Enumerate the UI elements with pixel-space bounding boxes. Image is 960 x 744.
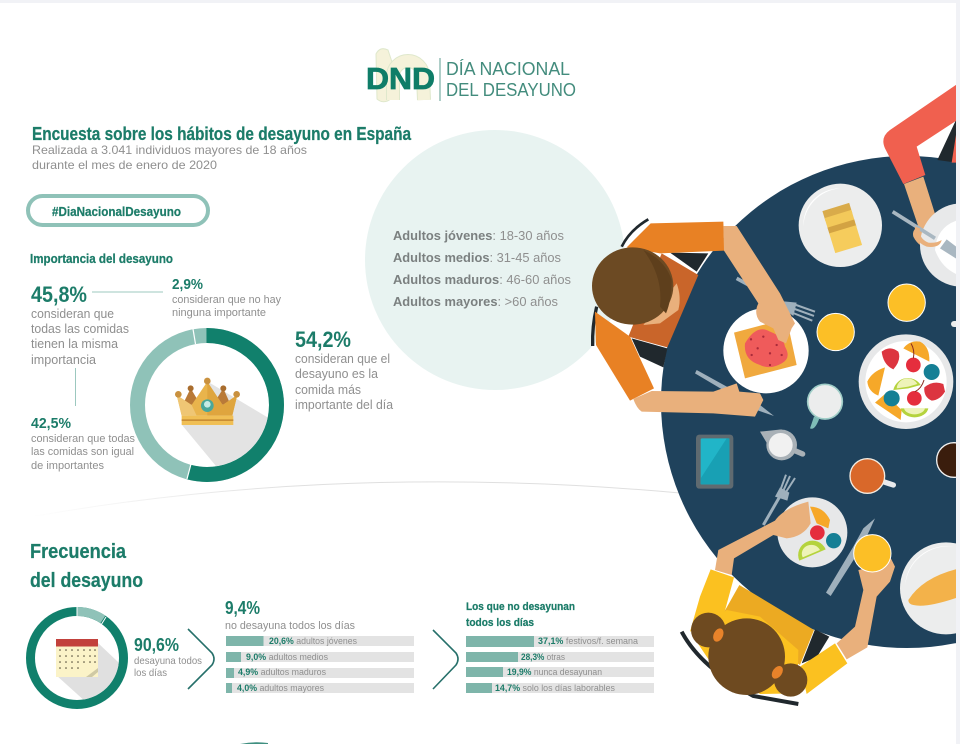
- icon: calendar: [56, 639, 119, 700]
- stat 54,2%: consideran que el: [295, 352, 390, 366]
- bar chart: adult groups: 4,0% adultos mayores: [237, 683, 324, 693]
- cup: [808, 384, 842, 419]
- section divider curve: [30, 482, 680, 517]
- icon: crown: [175, 378, 268, 466]
- logo: Día Nacional del Desayuno: DEL DESAYUNO: [446, 80, 576, 100]
- survey description: Realizada a 3.041 individuos mayores de 18 años: [32, 143, 307, 157]
- stat 2,9%: consideran que no hay: [172, 294, 281, 306]
- table: [661, 156, 960, 648]
- stat 54,2%: 54,2%: [295, 327, 351, 352]
- stat 45,8%: todas las comidas: [31, 322, 129, 336]
- orange slices: [867, 341, 929, 420]
- milk cup handle: [810, 417, 819, 429]
- bar chart: adult groups: 9,0% adultos medios: [246, 652, 328, 662]
- knife: [695, 370, 774, 416]
- bar chart: adult groups: 4,9% adultos maduros: [238, 667, 326, 677]
- stat 45,8%: [31, 282, 129, 367]
- stat 90,6%: [134, 635, 202, 679]
- stat 45,8%: 45,8%: [31, 282, 87, 307]
- juice glasses: [817, 284, 925, 351]
- tea cup: [850, 459, 893, 493]
- next section icon cut off: [240, 742, 268, 744]
- heading: del desayuno: [30, 569, 143, 592]
- bar chart: reasons: [466, 636, 654, 693]
- stat 54,2%: desayuno es la: [295, 367, 378, 381]
- survey description: [32, 143, 307, 172]
- arrow: chevron 1: [188, 629, 214, 689]
- stat 54,2%: comida más: [295, 383, 361, 397]
- illustration: breakfast table: [592, 83, 960, 704]
- heading: Importancia del desayuno: [30, 252, 173, 266]
- stat 45,8%: tienen la misma: [31, 337, 118, 351]
- plate right with knife: [893, 203, 960, 287]
- stat 90,6%: 90,6%: [134, 635, 179, 655]
- stat 42,5%: de importantes: [31, 460, 104, 472]
- survey description: durante el mes de enero de 2020: [32, 158, 217, 172]
- stat 42,5%: [31, 415, 135, 472]
- plate with crackers: [799, 184, 882, 267]
- bar chart: reasons: 14,7% solo los días laborables: [495, 683, 615, 693]
- heading: los que no desayunan: todos los días: [466, 617, 534, 629]
- heading: los que no desayunan: [466, 601, 575, 629]
- bar chart: adult groups: [226, 636, 414, 693]
- stat 45,8%: importancia: [31, 353, 96, 367]
- person in orange: [592, 219, 795, 417]
- upper illustration items: [592, 83, 960, 429]
- stat 42,5%: 42,5%: [31, 415, 71, 432]
- strawberries: [882, 348, 945, 401]
- fruit plate: [859, 334, 953, 429]
- knife lower: [826, 518, 875, 596]
- stat 9,4%: no desayuna todos los días: [225, 620, 355, 632]
- logo: Día Nacional del Desayuno: DND: [366, 61, 435, 96]
- plate with toast: [723, 308, 809, 393]
- stat 45,8%: consideran que: [31, 307, 114, 321]
- stat 9,4%: [225, 598, 355, 632]
- small white item at table edge: [951, 321, 956, 327]
- age groups circle: Adultos medios: 31-45 años: [393, 250, 561, 265]
- age groups circle: Adultos maduros: 46-60 años: [393, 272, 571, 287]
- logo: Día Nacional del Desayuno: DÍA NACIONAL: [446, 59, 570, 79]
- bar chart: adult groups: 20,6% adultos jóvenes: [269, 636, 357, 646]
- donut chart with calendar: [30, 607, 135, 712]
- plate lower: [777, 497, 847, 567]
- stat 54,2%: [295, 327, 393, 412]
- heading: los que no desayunan: Los que no desayunan: [466, 601, 575, 613]
- bar chart: reasons: 37,1% festivos/f. semana: [538, 636, 638, 646]
- logo: Día Nacional del Desayuno: [366, 49, 576, 102]
- age groups circle: Adultos jóvenes: 18-30 años: [393, 228, 564, 243]
- person in coral: [883, 83, 958, 249]
- stat 42,5%: consideran que todas: [31, 433, 135, 445]
- lime slices: [893, 378, 928, 417]
- stat 42,5%: las comidas son igual: [31, 446, 134, 458]
- person in yellow: [682, 502, 895, 704]
- hashtag pill: #DiaNacionalDesayuno: [52, 204, 181, 219]
- heading: [30, 540, 143, 592]
- title: Encuesta sobre los hábitos de desayuno en España: [32, 124, 412, 144]
- bread plate: [900, 542, 960, 634]
- panel: importancia del desayuno: [30, 252, 393, 495]
- juice glass lower: [854, 535, 891, 572]
- arrow: chevron 2: [433, 630, 458, 689]
- bar chart: reasons: 19,9% nunca desayunan: [507, 667, 602, 677]
- tablet: [696, 435, 733, 489]
- stat 2,9%: [172, 276, 281, 319]
- fork lower: [763, 475, 795, 525]
- fork: [737, 278, 815, 321]
- lower illustration items: [682, 417, 960, 704]
- bar chart: reasons: 28,3% otras: [521, 652, 565, 662]
- age groups circle: Adultos mayores: >60 años: [393, 294, 558, 309]
- stat 90,6%: desayuna todos: [134, 655, 202, 667]
- stat 54,2%: importante del día: [295, 398, 393, 412]
- heading: Frecuencia: [30, 540, 127, 563]
- stat 9,4%: 9,4%: [225, 598, 260, 618]
- donut chart with crown: [138, 329, 290, 495]
- stat 2,9%: 2,9%: [172, 276, 203, 293]
- stat 2,9%: ninguna importante: [172, 307, 266, 319]
- creamer: [760, 429, 803, 460]
- stat 90,6%: los días: [134, 667, 167, 679]
- age groups circle: [365, 130, 625, 390]
- panel: frecuencia del desayuno: [30, 540, 654, 744]
- coffee cup: [936, 442, 956, 478]
- hashtag pill: [28, 196, 208, 225]
